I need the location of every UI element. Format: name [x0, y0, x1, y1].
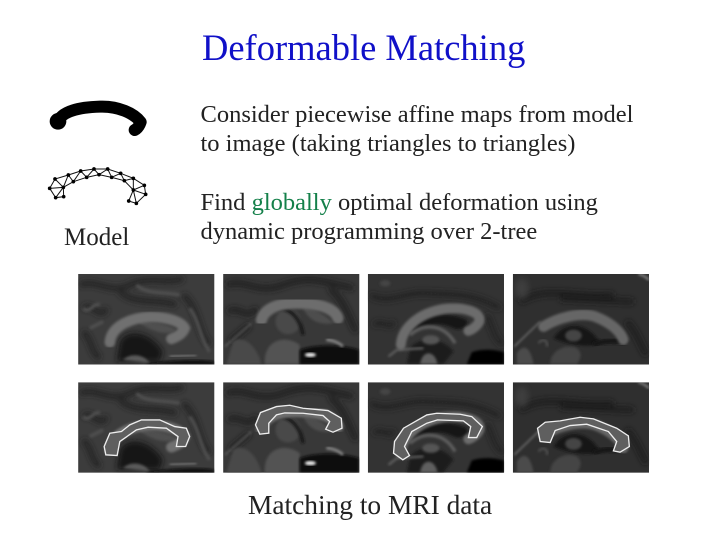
caption: Matching to MRI data: [248, 490, 492, 520]
model label: Model: [64, 224, 129, 251]
MRI scan 2 with matched outline: [223, 382, 360, 473]
text block: globally optimal deformation: Find globally optimal deformation using: [200, 189, 598, 216]
icon: solid model silhouette: [50, 107, 141, 130]
MRI scan 4, unmatched: [512, 274, 650, 364]
title: Deformable Matching: [202, 27, 525, 68]
text block: globally optimal deformation: [200, 189, 598, 245]
text block: piecewise affine maps: Consider piecewise affine maps from model: [200, 101, 634, 128]
MRI scan 4 with matched outline: [512, 382, 650, 473]
text block: piecewise affine maps: [200, 101, 634, 157]
text block: globally optimal deformation: dynamic programming over 2-tree: [200, 218, 537, 245]
MRI scan 1, unmatched: [78, 274, 214, 364]
text block: piecewise affine maps: to image (taking triangles to triangles): [200, 130, 575, 157]
icon: triangulated model mesh: [48, 167, 147, 205]
MRI scan 2, unmatched: [223, 274, 360, 364]
MRI scan 3 with matched outline: [368, 382, 504, 473]
MRI scan 1 with matched outline: [78, 382, 214, 473]
MRI scan 3, unmatched: [368, 274, 504, 364]
